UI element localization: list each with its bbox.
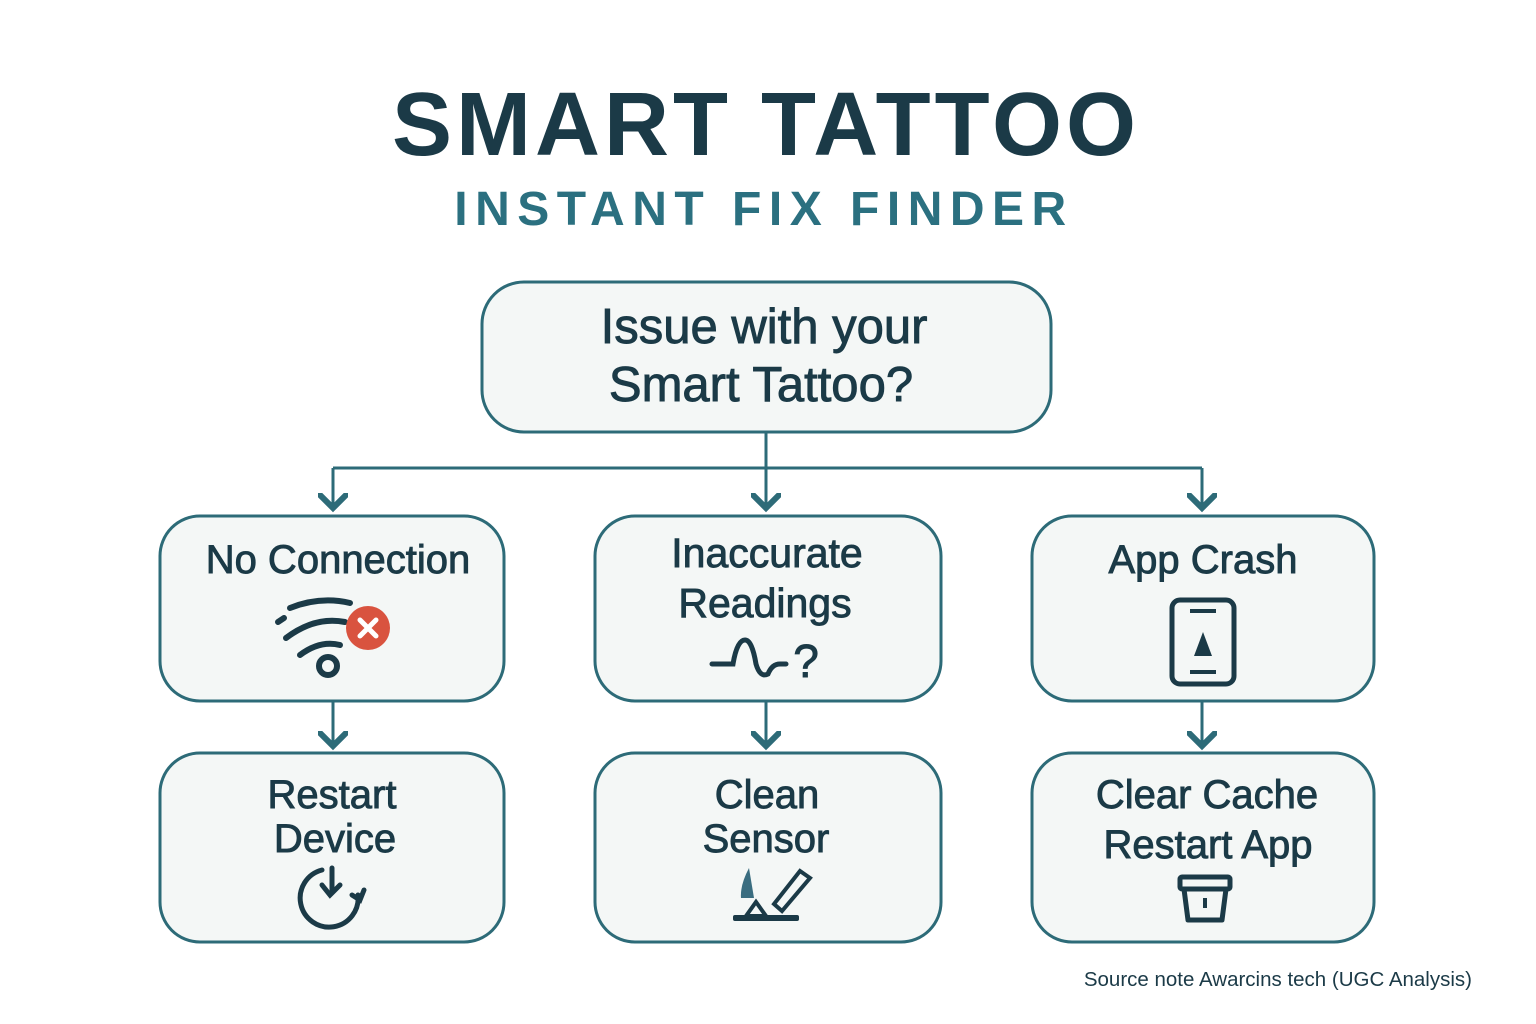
panel: inaccurate readings: ? [793,635,819,687]
panel: restart device [160,753,504,942]
icon: phone with warning [1172,600,1234,684]
icon: trash bin [1180,877,1230,920]
icon: drop and swab [733,868,810,921]
panel: clear cache restart app: Restart App [1103,823,1313,867]
subtitle: INSTANT FIX FINDER [454,183,1074,236]
source note: Source note Awarcins tech (UGC Analysis) [1084,968,1472,991]
panel: restart device: Restart [268,773,396,817]
panel: app crash: App Crash [1109,538,1297,582]
icon: wave with question [712,640,786,675]
panel: no connection [160,516,504,701]
icon: restart power [300,868,364,927]
panel: inaccurate readings: Inaccurate [671,530,863,576]
panel: restart device: Device [274,817,396,861]
panel: clean sensor [595,753,941,942]
arrows: branching connectors [333,433,1202,746]
panel: main question: Smart Tattoo? [609,358,913,412]
icon: wifi error [278,600,390,675]
panel: clean sensor: Sensor [703,817,829,861]
panel: main question: Issue with your [601,300,927,354]
panel: clear cache restart app [1032,753,1374,942]
panel: clean sensor: Clean [715,773,819,817]
panel: main question [482,282,1051,432]
panel: inaccurate readings: Readings [678,580,852,626]
panel: app crash [1032,516,1374,701]
title: SMART TATTOO [392,75,1140,175]
panel: clear cache restart app: Clear Cache [1096,773,1318,817]
panel: inaccurate readings [595,516,941,701]
panel: no connection: No Connection [206,538,470,582]
